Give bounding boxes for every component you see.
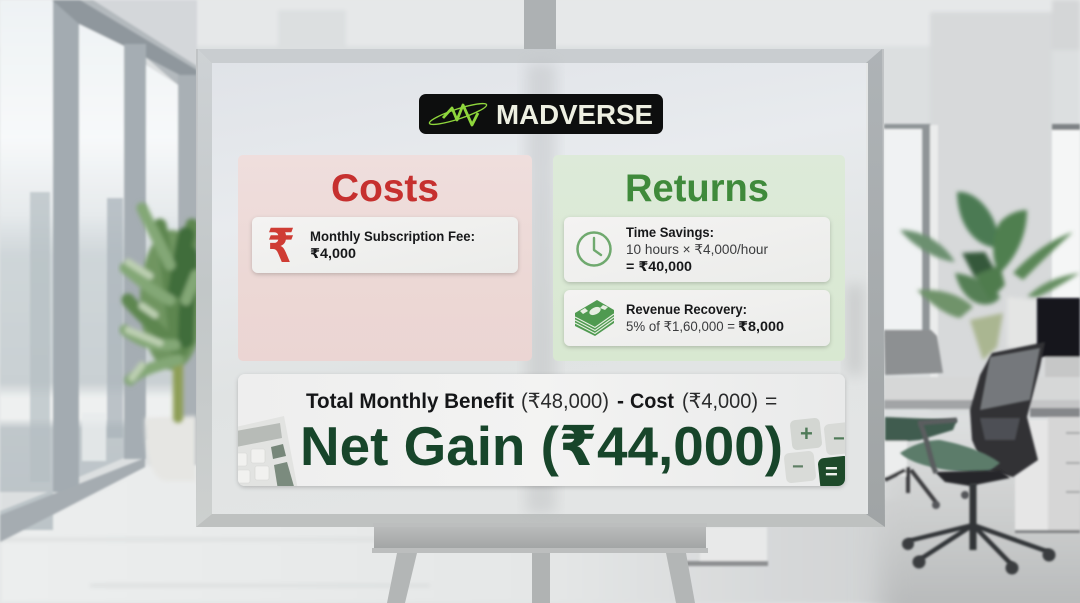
revenue recovery text: ₹8,000 bbox=[738, 319, 784, 334]
panel: returns bbox=[553, 155, 845, 361]
card: time savings bbox=[564, 217, 830, 282]
icon: madverse wave mark bbox=[428, 100, 488, 128]
equation line: (₹48,000) bbox=[521, 390, 609, 413]
illustration: calculator buttons: + bbox=[800, 421, 813, 446]
equation line: - bbox=[617, 390, 624, 413]
equation line: Cost bbox=[630, 390, 674, 413]
easel mast bbox=[524, 0, 556, 50]
floor shading on right bbox=[880, 430, 1080, 603]
time savings text bbox=[626, 225, 768, 274]
frosted glass bbox=[212, 63, 866, 514]
illustration: calculator buttons: − bbox=[833, 428, 845, 450]
subscription fee text bbox=[310, 229, 475, 261]
left plant bbox=[125, 208, 204, 481]
time savings text: = ₹40,000 bbox=[626, 259, 692, 274]
logo wordmark: MADVERSE bbox=[496, 99, 653, 130]
card: monthly subscription fee bbox=[252, 217, 518, 273]
right plant bbox=[900, 192, 1080, 360]
back office chair bbox=[884, 330, 969, 509]
subscription fee text: Monthly Subscription Fee: bbox=[310, 229, 475, 244]
equation line: Total Monthly Benefit bbox=[306, 390, 514, 413]
illustration: calculator buttons: − bbox=[792, 456, 804, 478]
equation line bbox=[306, 390, 777, 413]
returns heading: Returns bbox=[625, 167, 769, 210]
revenue recovery text bbox=[626, 302, 784, 334]
logo badge bbox=[419, 94, 663, 134]
illustration: calculator buttons: = bbox=[825, 459, 838, 484]
whiteboard bbox=[196, 49, 885, 527]
floor bbox=[0, 465, 1080, 603]
illustration: calculator bbox=[238, 416, 297, 486]
board frame bbox=[196, 49, 885, 527]
left windows bbox=[0, 0, 198, 542]
right windows bbox=[884, 124, 1080, 385]
icon: money stack bbox=[575, 300, 614, 336]
net gain result: Net Gain (₹44,000) bbox=[300, 415, 783, 477]
easel legs bbox=[387, 553, 695, 603]
equation line: = bbox=[765, 390, 777, 413]
costs heading: Costs bbox=[331, 167, 439, 210]
icon: rupee: ₹ bbox=[267, 219, 295, 272]
panel: costs bbox=[238, 155, 532, 361]
easel tray bbox=[372, 523, 708, 553]
mast shadow through glass bbox=[526, 63, 556, 514]
equation line: (₹4,000) bbox=[682, 390, 758, 413]
icon: clock bbox=[578, 232, 610, 266]
illustration: calculator buttons bbox=[784, 418, 845, 486]
card: revenue recovery bbox=[564, 290, 830, 346]
subscription fee text: ₹4,000 bbox=[310, 246, 356, 261]
revenue recovery text: Revenue Recovery: bbox=[626, 302, 747, 317]
desk and monitor bbox=[884, 298, 1080, 533]
time savings text: Time Savings: bbox=[626, 225, 714, 240]
time savings text: 10 hours × ₹4,000/hour bbox=[626, 242, 768, 257]
reflection on glass bbox=[846, 285, 864, 375]
revenue recovery text: 5% of ₹1,60,000 = bbox=[626, 319, 735, 334]
front office chair bbox=[900, 342, 1056, 574]
panel: net gain summary bbox=[234, 374, 857, 492]
low cabinet behind easel bbox=[686, 527, 768, 566]
